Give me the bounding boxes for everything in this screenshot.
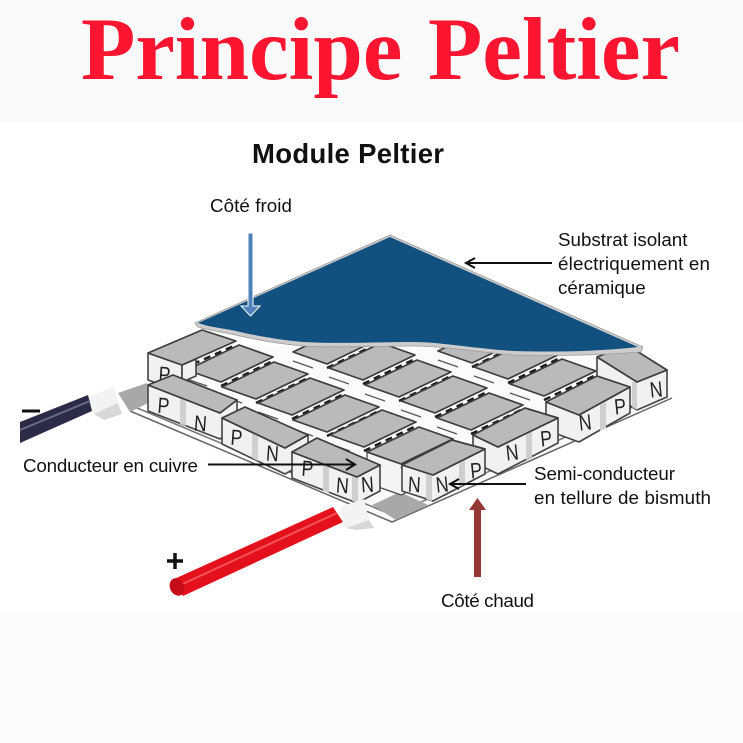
corner front block P N N: N [360,473,375,498]
rear conductors and semiconductors [182,326,596,495]
bottom ceramic plate [130,345,672,522]
left front block P N [148,375,237,439]
block with N and P, right edge [546,376,630,442]
left front block P N: N [193,412,208,437]
title: Peltier [428,1,680,99]
front block N N P with semiconductor legs: N [407,473,421,498]
middle front block P N: P [230,426,243,451]
middle front block P N: N [265,442,280,467]
label: ceramic substrate: céramique [558,277,646,298]
block with N and P, right edge: P [613,395,627,420]
plus sign [167,553,183,569]
heading: Module Peltier: Module Peltier [252,138,444,169]
minus sign [22,410,40,412]
positive wire [167,499,374,598]
block with N and P, middle right: P [539,427,553,452]
ceramic substrate sheet [195,235,643,356]
block with N and P, right edge: N [578,411,593,436]
rear left block P [148,330,236,392]
rear left block P: P [158,363,171,388]
front block N N P with semiconductor legs: N [435,473,450,498]
label: copper conductor: Conducteur en cuivre [23,455,198,476]
block with N and P, middle right [473,408,558,474]
label: Côté chaud: Côté chaud [441,590,534,611]
middle front block P N [222,407,308,474]
corner front block P N N: P [301,457,314,482]
arrow: to semiconductor [450,479,526,489]
diagram: Peltier module [118,235,672,522]
negative wire [20,387,122,443]
contact pad left [118,383,150,412]
rear right block N: N [649,378,664,403]
corner front block P N N [292,438,380,503]
title: Principe [81,1,402,99]
label: ceramic substrate: électriquement en [558,253,710,274]
label: semiconductor: en tellure de bismuth [534,487,711,508]
arrow: to substrate [466,258,552,268]
label: ceramic substrate: Substrat isolant [558,229,688,250]
contact pad right [372,492,428,520]
rear right block N [597,345,667,410]
block with N and P, middle right: N [505,441,520,466]
label: Côté froid: Côté froid [210,195,292,216]
label: semiconductor: Semi-conducteur [534,463,675,484]
corner front block P N N: N [335,474,350,499]
front block N N P with semiconductor legs: P [469,459,483,484]
arrow: hot side [469,498,486,577]
arrow: to copper conductor [208,459,355,470]
left front block P N: P [157,394,170,419]
front block N N P with semiconductor legs [402,440,485,501]
arrow: cold side [241,233,260,316]
